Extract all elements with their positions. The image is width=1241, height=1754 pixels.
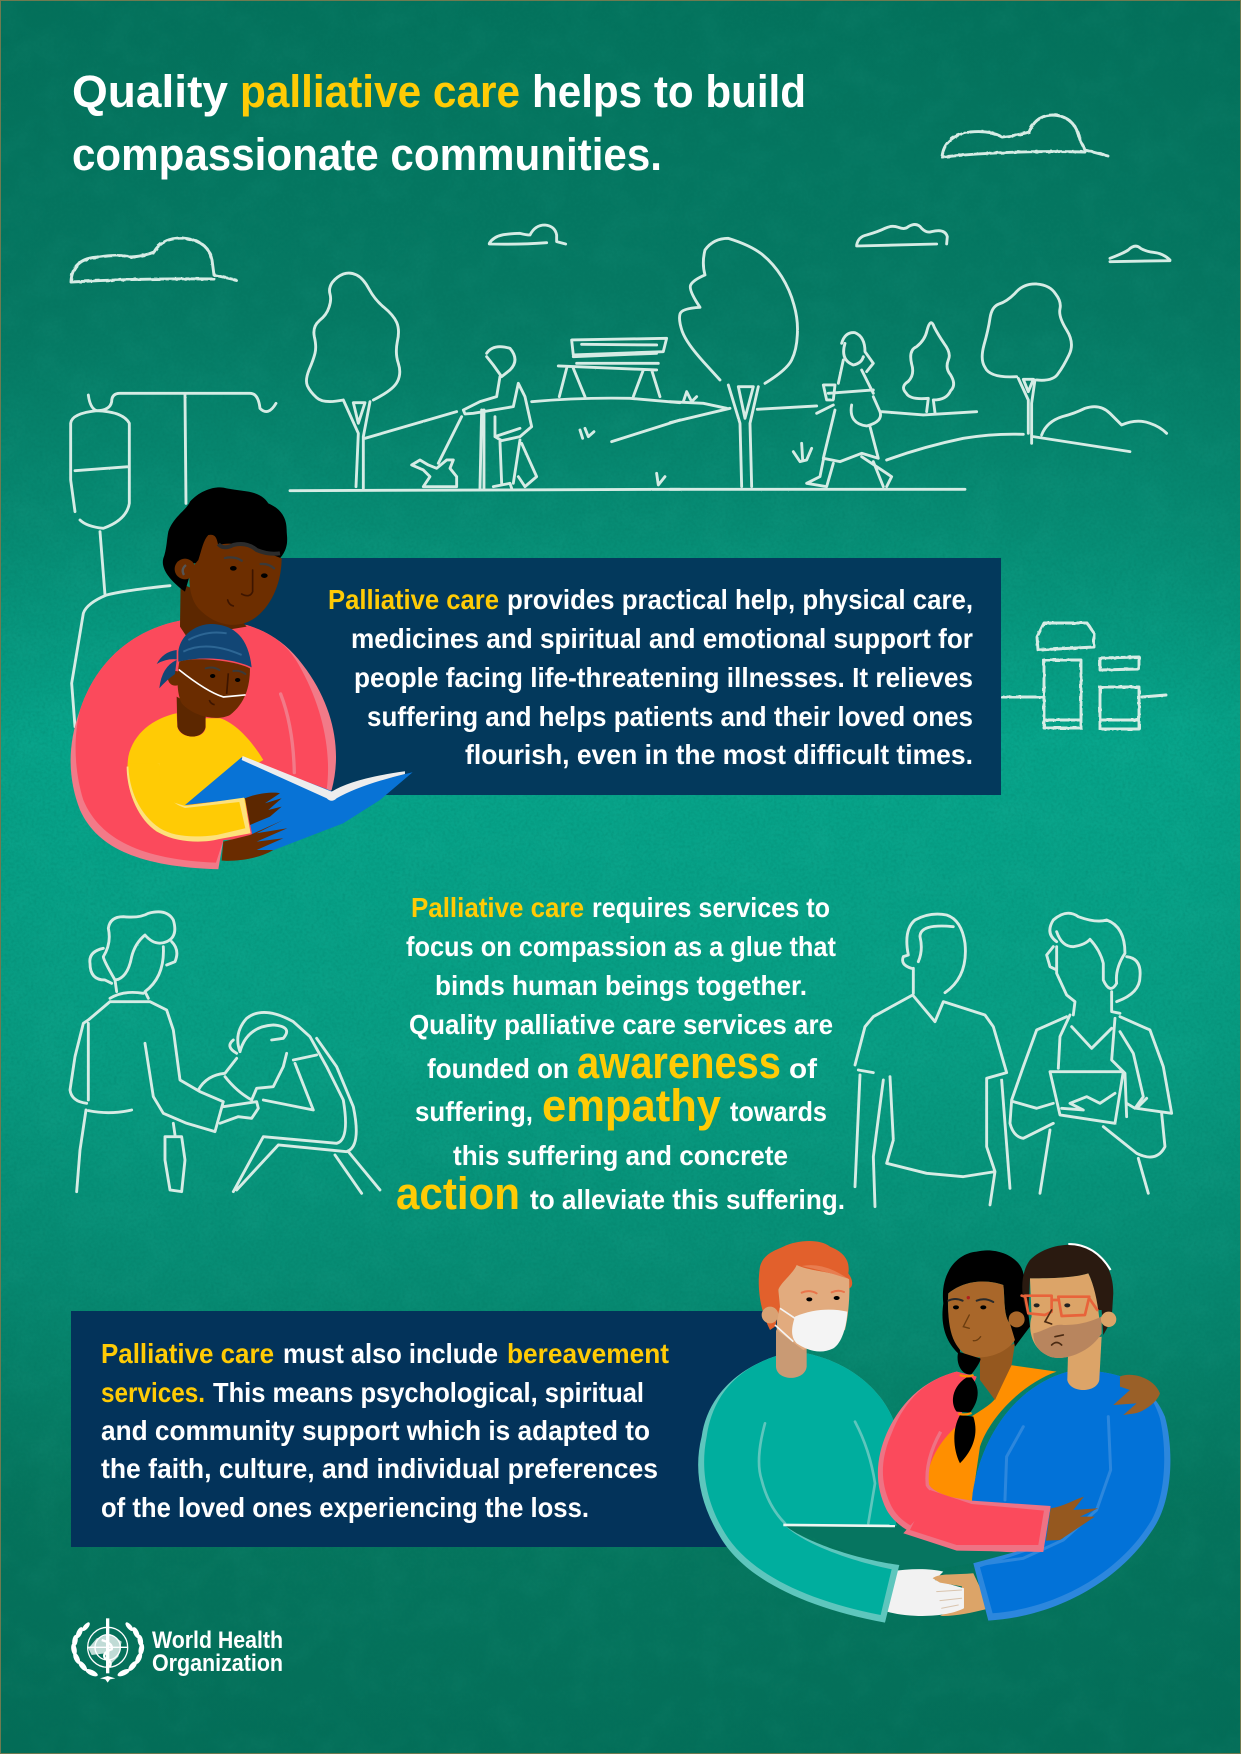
woman braid [953, 1352, 981, 1463]
panel text: of the loved ones experiencing the loss. [101, 1492, 589, 1523]
nurse [1010, 913, 1172, 1193]
man face [1030, 1273, 1102, 1358]
panel text: medicines and spiritual and emotional support for [351, 623, 973, 654]
panel text: Palliative care [101, 1338, 274, 1369]
chalk line [783, 1521, 895, 1530]
middle text block: action [396, 1168, 520, 1219]
illustration: carer comforting grieving couple [698, 1241, 1170, 1623]
ground line [670, 402, 977, 489]
chalk nurse and patient [70, 912, 380, 1193]
hands [245, 793, 282, 825]
panel text: bereavement [507, 1338, 669, 1369]
chalk man and nurse with tablet [855, 913, 1172, 1207]
woman face [948, 1281, 1015, 1357]
panel text: the faith, culture, and individual preferences [101, 1453, 658, 1484]
woman hand at waist [1046, 1497, 1098, 1541]
bench [558, 338, 667, 397]
title: helps to build [532, 66, 806, 117]
nurse [70, 912, 223, 1192]
dog [412, 460, 457, 487]
middle text block: awareness [577, 1037, 781, 1088]
man walking dog [438, 347, 537, 488]
panel text: This means psychological, spiritual [213, 1377, 644, 1408]
title: compassionate communities. [72, 129, 662, 180]
title [72, 66, 806, 180]
glasses [1022, 1296, 1097, 1316]
middle text block: towards [730, 1096, 827, 1127]
middle text block: suffering, [415, 1096, 533, 1127]
man neck and head [759, 1241, 852, 1378]
tree one [306, 273, 400, 488]
panel text: Palliative care [328, 584, 499, 615]
small cloud [489, 225, 566, 244]
man in teal sweater [698, 1353, 899, 1623]
patient [198, 1012, 380, 1193]
wreath leaves [70, 1621, 145, 1683]
middle text block: empathy [542, 1080, 721, 1131]
big tree [680, 238, 798, 487]
panel text [328, 584, 973, 770]
child sleeve [127, 763, 251, 842]
WHO logo [70, 1618, 283, 1683]
pink sweater [71, 621, 336, 869]
panel text: must also include [283, 1338, 498, 1369]
child neck [177, 697, 206, 737]
chalk IV stand [71, 393, 276, 595]
panel text: suffering and helps patients and their loved ones [367, 701, 973, 732]
middle text block: requires services to [592, 892, 830, 923]
chalk chair back [72, 586, 170, 727]
clouds [857, 225, 1170, 262]
middle text block: Palliative care [411, 892, 584, 923]
title: Quality [72, 66, 228, 117]
illustration: carer reading with patient [71, 487, 413, 869]
middle text block: binds human beings together. [435, 970, 807, 1001]
right tree [982, 284, 1071, 443]
child face [178, 659, 250, 718]
man hair [1022, 1245, 1113, 1335]
WHO wordmark: World Health [152, 1627, 283, 1654]
carer face [189, 535, 282, 625]
child yellow shirt [127, 713, 263, 840]
middle text block: focus on compassion as a glue that [406, 931, 836, 962]
middle text block: this suffering and concrete [453, 1140, 788, 1171]
clasped hands [887, 1569, 990, 1616]
hill and bush [887, 407, 1167, 460]
middle text block [396, 892, 845, 1219]
grass [580, 428, 665, 485]
oxygen tube [179, 670, 245, 697]
WHO wordmark: Organization [152, 1650, 283, 1677]
bandana [157, 624, 252, 688]
woman neck [980, 1343, 1015, 1400]
woman orange top [927, 1365, 1057, 1503]
man in blue sweater [972, 1372, 1170, 1621]
dark gap between figures [785, 1526, 1057, 1575]
book [185, 757, 413, 857]
middle text block: founded on [427, 1053, 569, 1084]
panel text: flourish, even in the most difficult times. [465, 739, 973, 770]
panel: bereavement services [71, 1311, 781, 1547]
panel text: and community support which is adapted to [101, 1415, 650, 1446]
woman hand on shoulder [1113, 1375, 1160, 1415]
middle text block: Quality palliative care services are [409, 1009, 833, 1040]
grass [683, 392, 812, 462]
woman sleeve [903, 1495, 1051, 1552]
chalk pill bottles [1002, 623, 1166, 729]
panel text: provides practical help, physical care, [507, 584, 973, 615]
panel text: services. [101, 1377, 205, 1408]
chalk park scene, right half [670, 225, 1170, 489]
WHO emblem [70, 1618, 145, 1683]
carer hair [163, 487, 287, 592]
middle text block: of [789, 1053, 818, 1084]
small tree [904, 323, 954, 413]
panel text [101, 1338, 669, 1523]
carer neck [180, 583, 247, 637]
panel: what palliative care provides [230, 558, 1001, 795]
chalk park scene, left half [290, 225, 680, 491]
man neck [1067, 1337, 1102, 1390]
man [855, 914, 1010, 1207]
woman hair [942, 1250, 1030, 1355]
title: palliative care [240, 66, 520, 117]
woman pink sweater [878, 1372, 1057, 1553]
WHO wordmark [152, 1627, 283, 1677]
pregnant woman [807, 333, 892, 487]
ground and hills [290, 398, 680, 491]
middle text block: to alleviate this suffering. [530, 1184, 845, 1215]
chalk clouds [71, 115, 1108, 282]
panel text: people facing life-threatening illnesses. It relieves [354, 662, 973, 693]
